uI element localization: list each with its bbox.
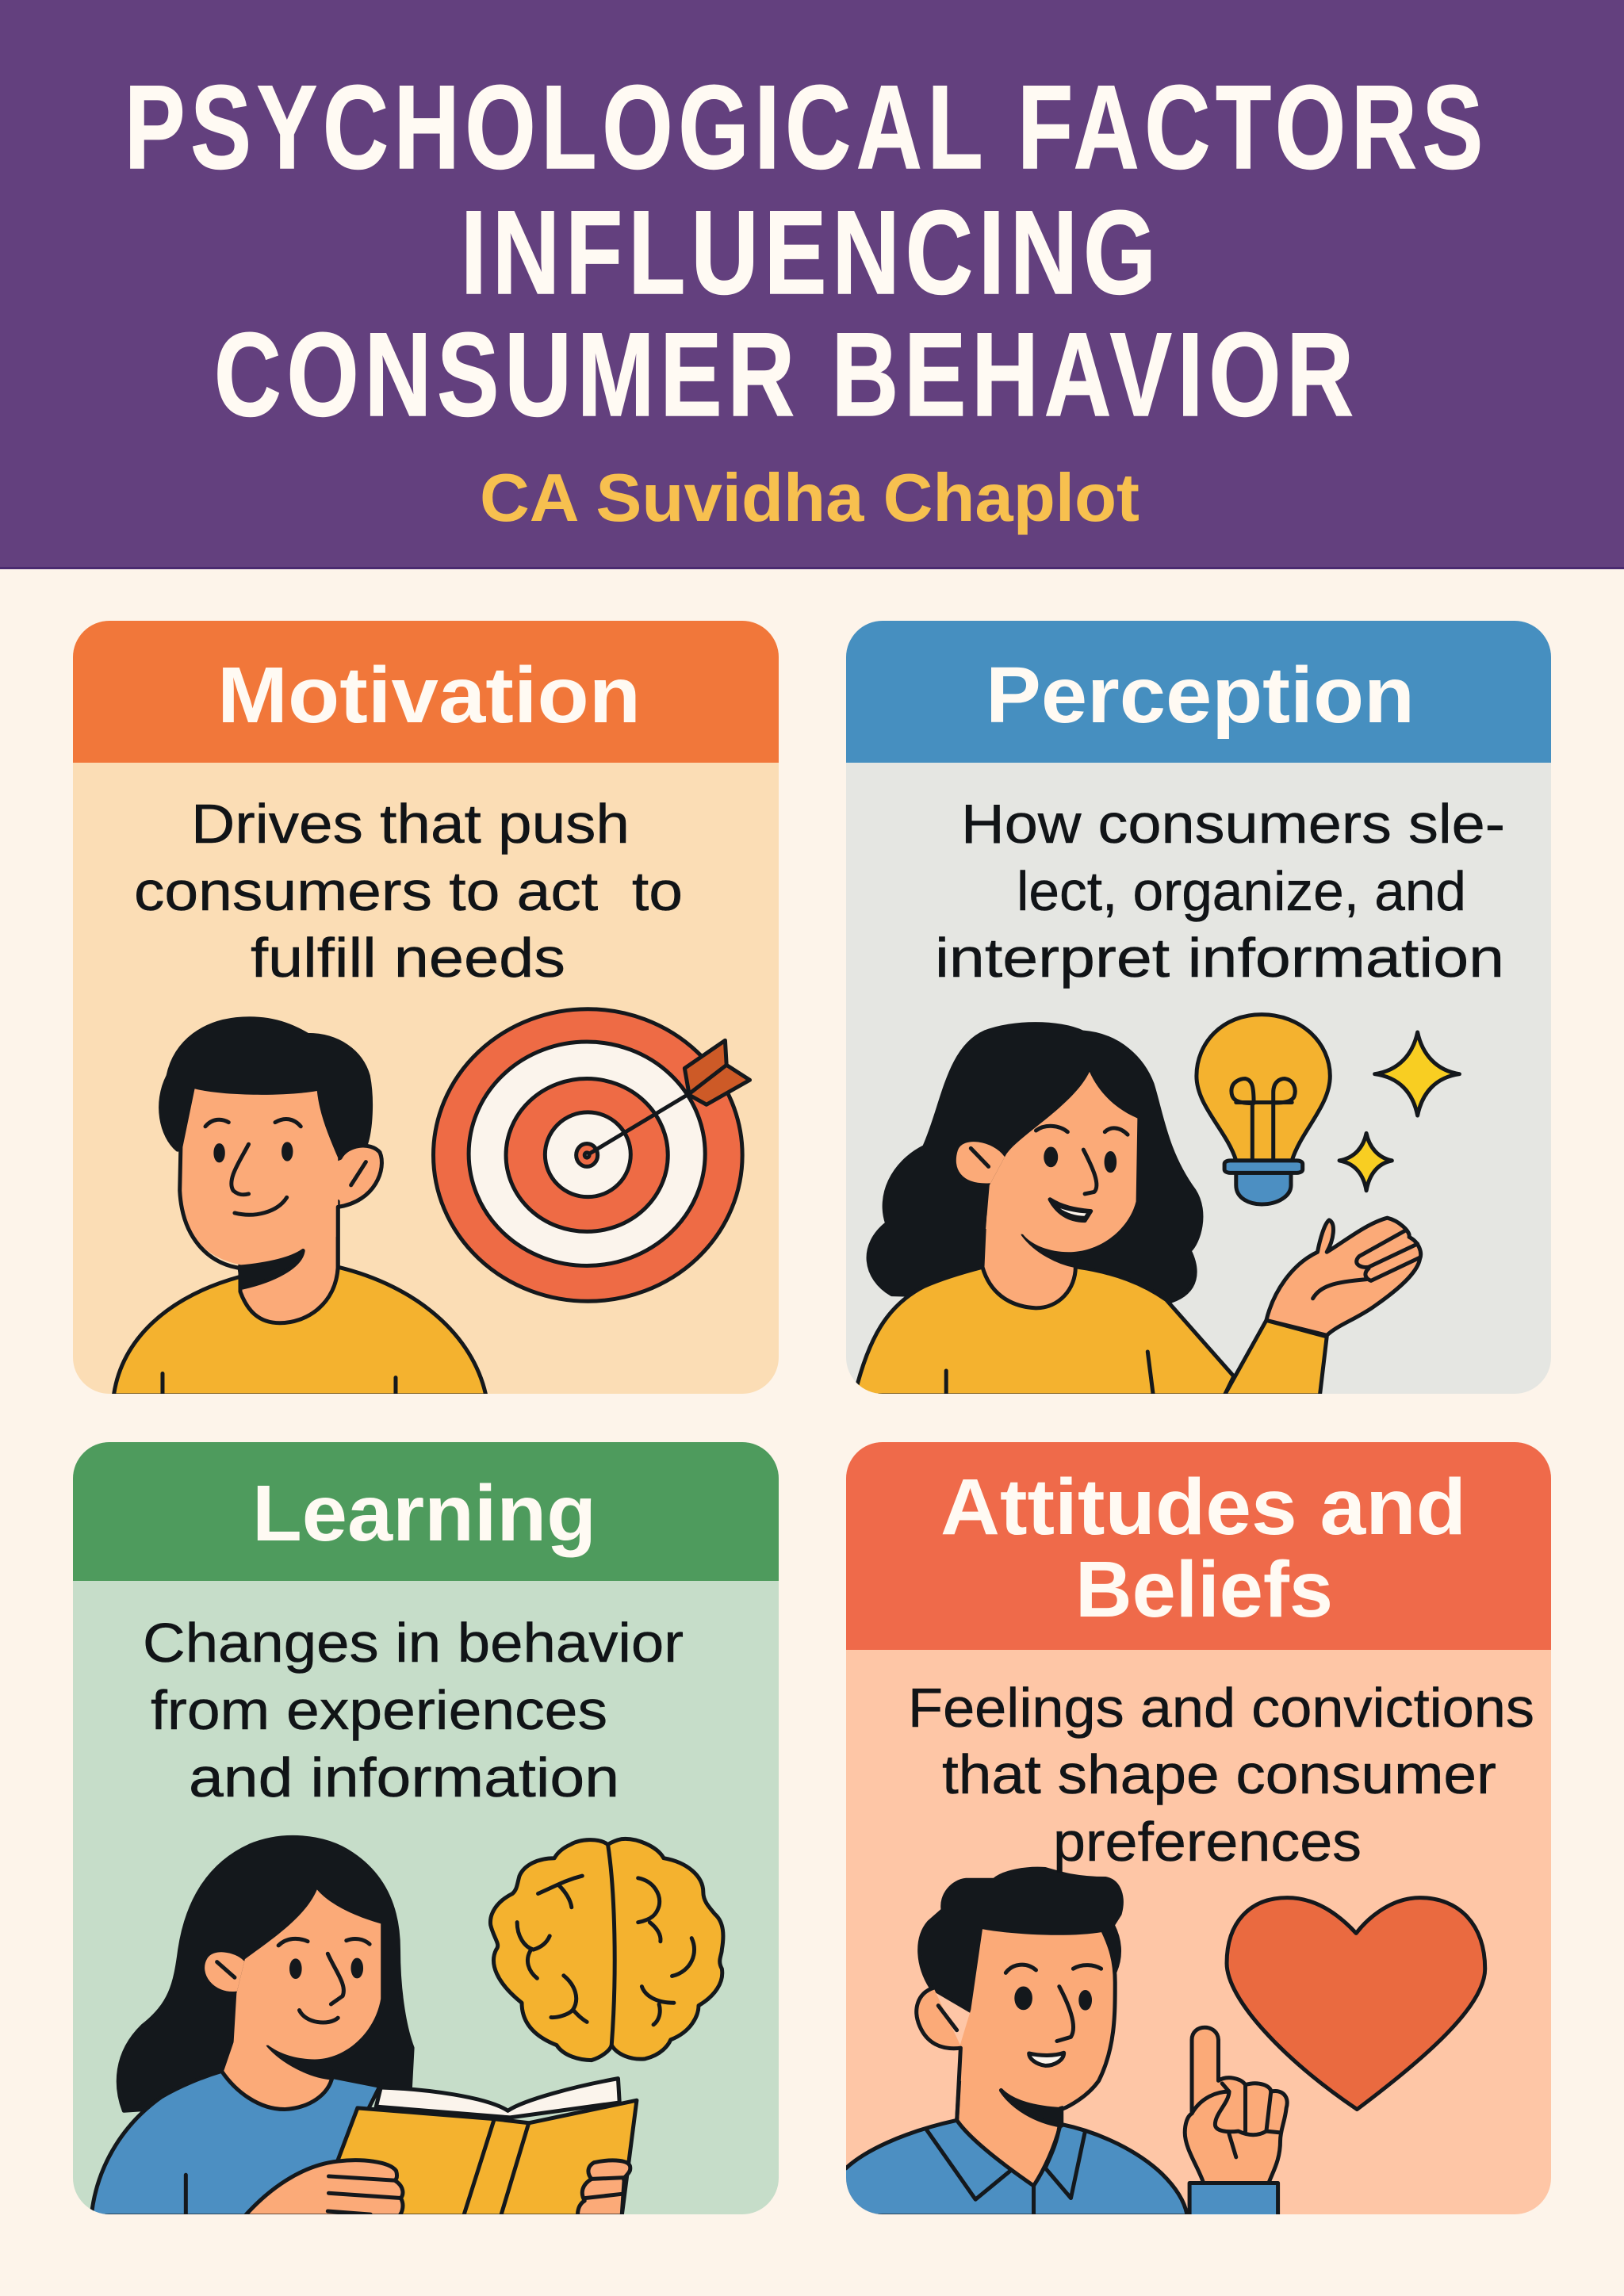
icon: heart xyxy=(1227,1898,1485,2110)
icon: hands holding book xyxy=(245,2160,630,2216)
description: attitudes and beliefs xyxy=(908,1677,1534,1873)
card body xyxy=(73,621,779,1394)
description: learning: from experiences xyxy=(151,1679,607,1741)
card heading band xyxy=(846,1442,1551,1650)
description: motivation: fulfill needs xyxy=(251,927,565,989)
description: learning xyxy=(143,1612,684,1808)
card body xyxy=(846,1442,1551,2214)
icon: open book xyxy=(333,2079,637,2216)
heading: perception: Perception xyxy=(986,651,1415,740)
card body xyxy=(73,1442,779,2214)
author subtitle: CA Suvidha Chaplot xyxy=(480,461,1139,536)
icon: pointing hand xyxy=(1185,2027,1287,2218)
description: perception xyxy=(935,793,1505,989)
icon: lightbulb xyxy=(1197,1015,1330,1204)
icon: target with arrow xyxy=(434,1009,750,1301)
card heading band xyxy=(73,1442,779,1581)
description: learning: and information xyxy=(189,1747,619,1808)
heading: attitudes and beliefs xyxy=(940,1463,1466,1634)
woman figure xyxy=(855,1024,1327,1395)
description: motivation: consumers to act to xyxy=(134,860,683,922)
panel: learning xyxy=(73,1442,779,2216)
heading: motivation: Motivation xyxy=(217,651,641,740)
man figure xyxy=(113,1019,486,1395)
illustration: man and target xyxy=(113,1009,750,1395)
card heading band xyxy=(73,621,779,763)
card body xyxy=(846,621,1551,1394)
description: perception: How consumers sle- xyxy=(961,793,1505,855)
illustration: woman reading with brain xyxy=(91,1837,723,2216)
description: motivation xyxy=(134,793,683,989)
man figure xyxy=(836,1869,1187,2216)
description: attitudes and beliefs: Feelings and convictions xyxy=(908,1677,1534,1739)
icon: brain xyxy=(490,1839,723,2061)
card heading band xyxy=(846,621,1551,763)
description: attitudes and beliefs: that shape consumer xyxy=(942,1743,1496,1805)
heading: learning: Learning xyxy=(252,1469,596,1558)
title: INFLUENCING xyxy=(461,186,1162,319)
icon: open hand xyxy=(1266,1218,1421,1335)
description: learning: Changes in behavior xyxy=(143,1612,684,1674)
heading: attitudes and beliefs: Attitudes and xyxy=(940,1463,1466,1552)
woman figure xyxy=(91,1837,412,2216)
description: perception: interpret information xyxy=(935,927,1504,989)
icon: sparkles xyxy=(1339,1032,1459,1191)
title xyxy=(124,60,1488,441)
description: motivation: Drives that push xyxy=(191,793,630,855)
illustration: man pointing with heart xyxy=(836,1869,1485,2218)
panel: motivation xyxy=(73,621,779,1395)
panel: attitudes and beliefs xyxy=(836,1442,1551,2218)
header banner xyxy=(0,0,1624,569)
heading: attitudes and beliefs: Beliefs xyxy=(1075,1545,1333,1634)
description: perception: lect, organize, and xyxy=(1017,860,1466,922)
panel: perception xyxy=(846,621,1551,1395)
description: attitudes and beliefs: preferences xyxy=(1053,1811,1362,1873)
illustration: woman with lightbulb xyxy=(855,1015,1459,1395)
